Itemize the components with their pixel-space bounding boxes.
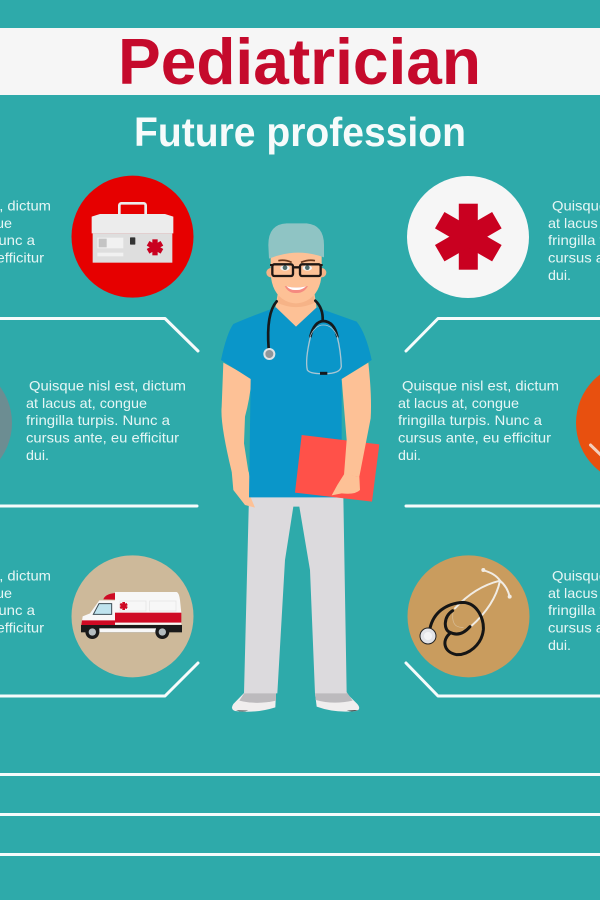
text block: middle left: cursus ante, eu efficitur — [26, 430, 179, 446]
icon: stethoscope — [407, 555, 529, 677]
text block: middle right: at lacus at, congue — [398, 395, 519, 411]
text block: bottom right — [548, 568, 600, 653]
icon: ambulance — [71, 555, 193, 677]
neck stethoscope — [264, 301, 341, 374]
title band — [0, 28, 600, 95]
text block: middle right: Quisque nisl est, dictum — [402, 378, 559, 394]
text block: middle left: Quisque nisl est, dictum — [29, 378, 186, 394]
left hand — [232, 471, 255, 508]
text block: middle right — [398, 378, 559, 463]
icon: star of life — [407, 176, 529, 298]
icon: grey circle, cropped at left edge — [0, 362, 12, 484]
subtitle: Future profession — [134, 109, 466, 155]
text block: middle left — [26, 378, 186, 463]
text block: top right — [548, 198, 600, 283]
left shoe — [232, 692, 276, 712]
text block: top left — [0, 198, 51, 283]
scrub shirt — [221, 307, 372, 497]
neck — [275, 290, 317, 327]
icon: medical kit — [71, 176, 193, 298]
right hand — [332, 474, 360, 495]
icon: orange circle, cropped at right edge — [576, 362, 600, 484]
text block: middle left: fringilla turpis. Nunc a — [26, 412, 170, 428]
left arm — [221, 363, 252, 473]
glasses and eyes — [270, 260, 323, 276]
title: Pediatrician — [118, 25, 481, 98]
right shoe — [315, 692, 359, 712]
right arm — [342, 363, 371, 477]
text block: middle left: dui. — [26, 447, 49, 463]
text block: middle right: dui. — [398, 447, 421, 463]
smile — [285, 286, 308, 293]
text block: top right: dui. — [548, 267, 571, 283]
trousers — [244, 496, 347, 693]
text block: middle left: at lacus at, congue — [26, 395, 147, 411]
surgical cap — [268, 223, 324, 259]
text block: middle right: fringilla turpis. Nunc a — [398, 412, 542, 428]
head — [266, 252, 326, 303]
doctor figure — [221, 223, 379, 712]
text block: middle right: cursus ante, eu efficitur — [398, 430, 551, 446]
text block: bottom right: dui. — [548, 637, 571, 653]
neck shadow — [277, 295, 315, 307]
folder — [295, 435, 379, 502]
text block: bottom left — [0, 568, 51, 653]
